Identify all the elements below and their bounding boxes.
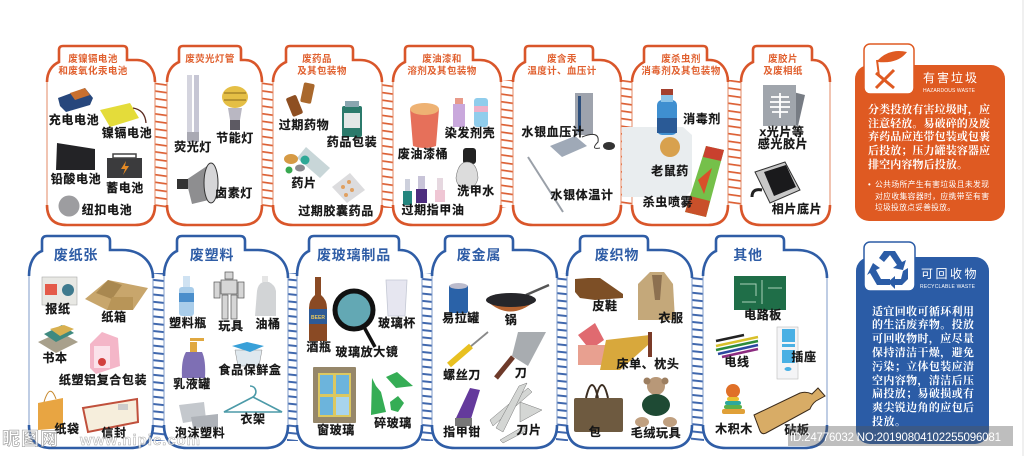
- icon: coat: [638, 272, 675, 320]
- icon: handbag: [574, 385, 623, 432]
- icon: water bottle: [179, 276, 194, 316]
- watermark: image id band: [788, 426, 1013, 446]
- text block: hazardous guidance: 排空内容物后投放。: [868, 157, 968, 171]
- watermark: site mark: 昵图网: [2, 429, 59, 449]
- icon: books: [38, 325, 78, 353]
- label: x-ray: x光片等: [759, 124, 805, 139]
- text block: recyclable guidance: 污染；立体包装应清: [872, 359, 974, 373]
- text block: recyclable guidance: 空内容物，清洁后压: [872, 373, 974, 387]
- label: leather shoes: 皮鞋: [592, 298, 618, 313]
- subtitle: english hazardous: HAZARDOUS WASTE: [923, 88, 976, 94]
- watermark: image id band: ID:24776032 NO:20190804102255096081: [790, 432, 1001, 444]
- panel title: others: 其他: [733, 247, 763, 263]
- icon: paper bag: [38, 391, 63, 430]
- text block: hazardous guidance: [868, 102, 990, 171]
- panel title: batteries: 废镍镉电池: [68, 53, 118, 65]
- icon: power strip: [777, 327, 798, 379]
- icon: beer bottle: [309, 277, 327, 341]
- icon: toy robot: [214, 272, 244, 319]
- label: blades: 刀片: [516, 422, 542, 437]
- icon: bedding: [578, 323, 652, 370]
- panel title: mercury: 废含汞: [547, 53, 577, 65]
- icon: teddy bear: [635, 377, 677, 427]
- label: cutting board: 砧板: [784, 422, 810, 437]
- icon: paint bucket: [410, 103, 439, 148]
- panel title: film: 废胶片: [768, 53, 798, 65]
- label: food box: 食品保鲜盒: [218, 362, 282, 377]
- panel title: metals: 废金属: [457, 247, 501, 263]
- label: thermometer: 水银体温计: [550, 187, 614, 202]
- label: mercury sphygmomanometer: 水银血压计: [521, 124, 585, 139]
- label: fluorescent lamp: 荧光灯: [174, 139, 212, 154]
- title: hazardous waste: 有害垃圾: [923, 70, 979, 85]
- icon: disinfectant bottle: [657, 89, 677, 135]
- watermark: site mark: [2, 429, 200, 449]
- label: photosensitive film: 感光胶片: [758, 136, 808, 151]
- panel: hazardous waste: [855, 44, 1005, 221]
- icon: nail polish bottles: [403, 176, 445, 205]
- label: hair dye: 染发剂壳: [445, 125, 495, 140]
- text block: recyclable guidance: 保持清洁干燥，避免: [872, 345, 974, 359]
- label: glass cup: 玻璃杯: [378, 315, 416, 330]
- label: wires: 电线: [724, 354, 750, 369]
- label: halogen lamp: 卤素灯: [215, 185, 253, 200]
- icon: screwdriver: [449, 332, 488, 365]
- icon: rat poison: [660, 137, 680, 157]
- icon: green medicine bottle: [342, 101, 362, 137]
- label: NiCd battery: 镍镉电池: [102, 125, 152, 140]
- label: blocks: 木积木: [715, 421, 753, 436]
- text block: hazardous note: 公共场所产生有害垃圾且未发现: [875, 179, 989, 189]
- panel subtitle: medicines: 及其包装物: [297, 65, 347, 77]
- icon: blades: [490, 383, 542, 443]
- icon: spilled pill bottles: [286, 82, 315, 117]
- label: socket: 插座: [791, 349, 817, 364]
- label: oil jug: 油桶: [255, 316, 281, 331]
- panel: mercury instruments: [513, 46, 621, 225]
- label: lotion bottle: 乳液罐: [173, 376, 211, 391]
- icon: yellow battery pack: [100, 103, 146, 127]
- icon: car battery: [107, 154, 142, 178]
- icon: nail polish remover: [456, 148, 478, 189]
- panel title: paper: 废纸张: [54, 247, 98, 263]
- label: circuit board: 电路板: [744, 307, 782, 322]
- label: magnifier: 玻璃放大镜: [335, 344, 399, 359]
- icon: magnifying glass: [335, 291, 375, 347]
- icon: oil jug: [255, 276, 276, 316]
- panel: medicines: [273, 46, 382, 225]
- icon: glass beaker: [386, 280, 407, 316]
- icon: newspaper: [42, 277, 77, 305]
- icon: sphygmomanometer: [550, 93, 615, 157]
- icon: fluorescent tube: [187, 75, 199, 142]
- panel title: glass: 废玻璃制品: [317, 247, 391, 263]
- label: newspaper: 报纸: [45, 301, 71, 316]
- icon: hazardous waste symbol: [864, 44, 914, 94]
- icon: stacking rings toy: [722, 384, 745, 414]
- panel: paints and solvents: [393, 46, 501, 225]
- subtitle: english recyclable: RECYCLABLE WASTE: [920, 284, 976, 290]
- title: recyclable: 可回收物: [921, 267, 979, 281]
- panel: pesticides: [622, 46, 728, 225]
- panel subtitle: mercury: 温度计、血压计: [527, 65, 597, 77]
- text block: hazardous note: 对应收集容器时，应携带至有害: [875, 191, 989, 201]
- label: lead-acid: 铅酸电池: [51, 171, 101, 186]
- panel subtitle: film: 及废相纸: [763, 65, 803, 77]
- label: plush toy: 毛绒玩具: [631, 425, 681, 440]
- icon: cleaver: [496, 332, 546, 378]
- text block: hazardous note: •: [868, 180, 871, 189]
- label: window glass: 窗玻璃: [317, 422, 355, 437]
- label: paper bag: 纸袋: [54, 421, 80, 436]
- panel: plastics: [164, 236, 288, 448]
- text block: hazardous guidance: 注意轻放。易破碎的及废: [868, 116, 990, 130]
- icon: can: [449, 283, 468, 313]
- label: plastic bottle: 塑料瓶: [169, 315, 207, 330]
- label: knife: 刀: [515, 366, 527, 380]
- text block: hazardous note: [868, 179, 989, 212]
- text block: recyclable guidance: 适宜回收可循环利用: [872, 304, 974, 318]
- icon: photos and negatives: [752, 162, 800, 203]
- label: insect spray: 杀虫喷雾: [643, 194, 693, 209]
- icon: food container: [232, 342, 264, 366]
- panel: recyclable waste: [856, 242, 989, 444]
- icon: 9V battery: [58, 88, 93, 112]
- text block: recyclable guidance: 的生活废弃物。投放: [872, 317, 974, 331]
- icon: insect spray can: [685, 146, 724, 217]
- label: sheets and pillows: 床单、枕头: [616, 356, 680, 371]
- icon: milk carton: [90, 332, 120, 374]
- panel title: fluorescent: 废荧光灯管: [185, 53, 235, 65]
- icon: lotion bottle: [182, 338, 205, 378]
- icon: airmail envelope: [83, 399, 138, 432]
- icon: circuit board: [734, 276, 786, 310]
- label: rechargeable battery: 充电电池: [49, 112, 99, 127]
- icon: thermometer: [528, 157, 563, 212]
- label: storage battery: 蓄电池: [106, 180, 144, 195]
- label: negatives: 相片底片: [772, 201, 822, 216]
- panel: waste paper: [29, 236, 153, 448]
- icon: coat hanger: [224, 386, 282, 412]
- label: composite packaging: 纸塑铝复合包装: [59, 372, 147, 387]
- panel subtitle: paints: 溶剂及其包装物: [407, 65, 477, 77]
- panel: glass: [297, 236, 422, 448]
- text block: hazardous guidance: 后投放；压力罐装容器应: [868, 143, 990, 157]
- label: expired capsules: 过期胶囊药品: [298, 203, 374, 218]
- label: clothes: 衣服: [658, 310, 684, 325]
- panel: textiles: [567, 236, 692, 448]
- panel title: paints: 废油漆和: [422, 53, 462, 65]
- icon: cardboard box: [85, 280, 148, 310]
- label: foam: 泡沫塑料: [175, 425, 225, 440]
- icon: frying pan: [486, 285, 549, 312]
- panel: waste batteries: [47, 46, 155, 225]
- text block: recyclable guidance: 可回收物时，应尽量: [872, 331, 974, 345]
- label: button cell: 纽扣电池: [82, 202, 132, 217]
- panel: fluorescent tubes: [167, 46, 262, 225]
- label: hanger: 衣架: [240, 411, 266, 426]
- text block: hazardous guidance: 分类投放有害垃圾时，应: [868, 102, 990, 116]
- label: bag: 包: [589, 424, 601, 439]
- label: books: 书本: [42, 350, 68, 365]
- icon: energy-saving bulb: [222, 86, 248, 130]
- icon: wires: [716, 335, 758, 357]
- label: energy-saving lamp: 节能灯: [216, 130, 254, 145]
- label: nail remover: 洗甲水: [457, 183, 495, 198]
- text block: recyclable guidance: [872, 304, 974, 428]
- panel: others: [703, 236, 827, 448]
- icon: capsule blister pack: [332, 173, 365, 203]
- icon: halogen lamp: [177, 163, 218, 204]
- label: pot: 锅: [505, 312, 517, 327]
- icon: nail clipper: [455, 388, 480, 426]
- icon: cutting board: [754, 388, 825, 434]
- label: disinfectant: 消毒剂: [683, 111, 721, 126]
- text block: recyclable guidance: 爽尖锐边角的应包后: [872, 400, 974, 414]
- icon: hair dye bottles: [453, 98, 488, 127]
- panel: film and photo paper: [741, 46, 830, 225]
- label: cardboard: 纸箱: [101, 309, 127, 324]
- label: toy: 玩具: [218, 319, 244, 333]
- panel: metals: [432, 236, 557, 448]
- label: broken glass: 碎玻璃: [374, 415, 412, 430]
- icon: broken glass: [371, 372, 413, 415]
- photo backdrop: rat poison plate: [622, 127, 692, 197]
- icon: button cell: [58, 196, 80, 216]
- panel title: plastics: 废塑料: [190, 247, 234, 263]
- connector stripes: hazardous row: [154, 80, 742, 208]
- label: expired medicine: 过期药物: [279, 117, 329, 132]
- connector stripes: recyclable row: [152, 273, 704, 441]
- label: envelope: 信封: [101, 425, 127, 440]
- icon: foam plastic: [179, 402, 218, 428]
- icon: x-ray film: [763, 85, 805, 126]
- icon: leather shoes: [575, 278, 623, 300]
- icon: tablets: [284, 147, 330, 178]
- label: nail polish: 过期指甲油: [401, 202, 465, 217]
- icon: lead-acid battery: [56, 143, 95, 170]
- label: can: 易拉罐: [442, 310, 480, 325]
- panel subtitle: pesticides: 消毒剂及其包装物: [641, 65, 721, 77]
- label: medicine packaging: 药品包装: [327, 134, 377, 149]
- panel title: pesticides: 废杀虫剂: [661, 53, 701, 65]
- text block: recyclable guidance: 投放。: [872, 414, 906, 428]
- panel title: textiles: 废织物: [595, 247, 639, 263]
- icon: beer bottle: BEER: [311, 315, 325, 321]
- label: nail clipper: 指甲钳: [443, 424, 481, 439]
- panel title: medicines: 废药品: [302, 53, 332, 65]
- icon: recycling symbol: [864, 242, 915, 291]
- text block: hazardous note: 垃圾投放点妥善投放。: [875, 202, 955, 212]
- label: tablets: 药片: [291, 175, 317, 190]
- label: paint bucket: 废油漆桶: [398, 146, 448, 161]
- label: screwdriver: 螺丝刀: [443, 367, 481, 382]
- text block: hazardous guidance: 弃药品应连带包装或包裹: [868, 129, 990, 143]
- label: rat poison: 老鼠药: [651, 163, 689, 178]
- watermark: site mark: www.nipic.com: [79, 432, 200, 449]
- panel subtitle: batteries: 和废氧化汞电池: [58, 65, 128, 77]
- icon: window: [313, 367, 356, 423]
- label: beer bottle: 酒瓶: [306, 339, 332, 354]
- text block: recyclable guidance: 扁投放；易破损或有: [872, 386, 974, 400]
